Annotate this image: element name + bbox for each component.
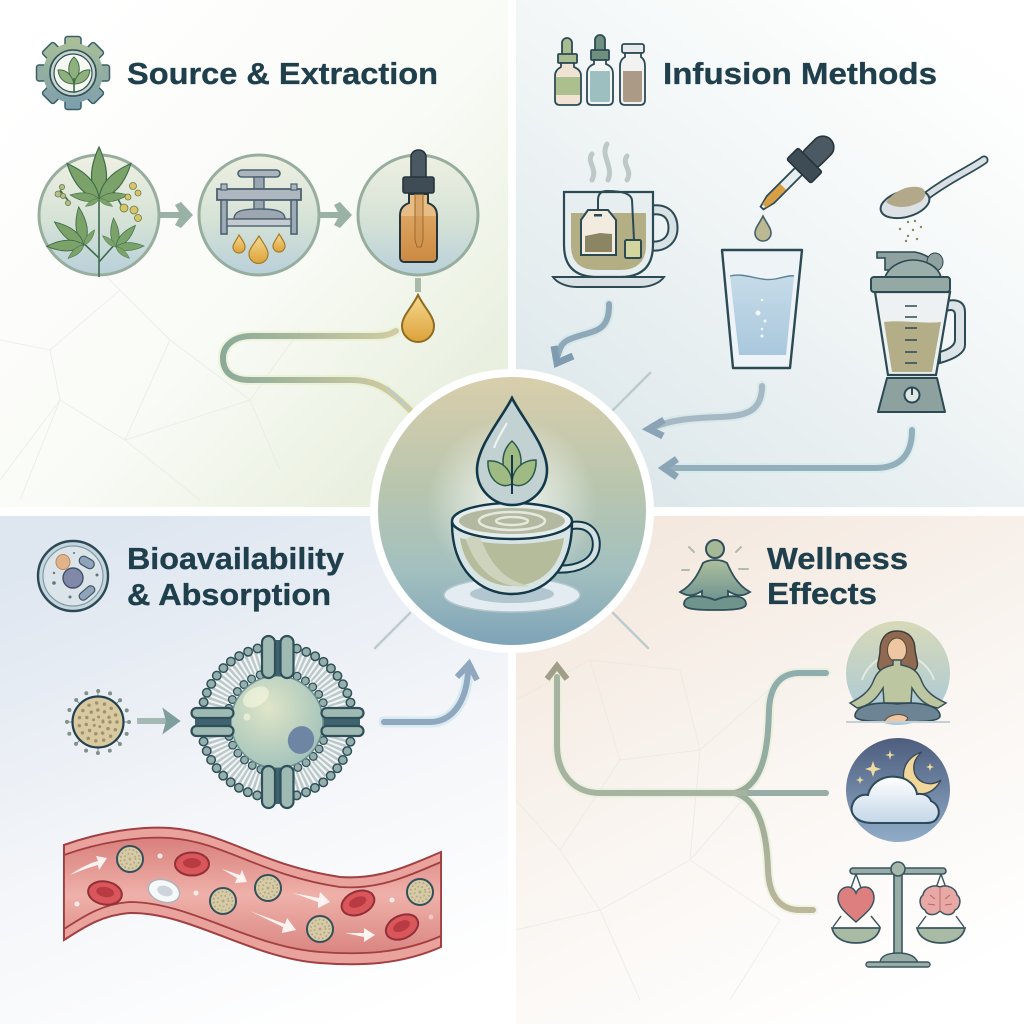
icon: gear with leaf: [36, 36, 110, 110]
heading: wellness effects: [767, 541, 908, 611]
heading: source and extraction: Source & Extraction: [127, 56, 438, 91]
icon: liposome: [192, 636, 364, 808]
icon: meditating figure: [680, 540, 750, 610]
icon: oil bottle circle: [358, 150, 478, 275]
arrow: oil to centre: [223, 331, 410, 410]
vessel flow arrows: [70, 856, 375, 942]
connector stem: [415, 278, 421, 292]
heading: infusion methods: Infusion Methods: [663, 56, 937, 91]
icon: cell: [38, 541, 108, 611]
icon: moon and cloud: [846, 738, 950, 842]
illustration: blood vessel: [64, 828, 441, 964]
panel: infusion methods: [553, 35, 984, 477]
blood cells: [86, 846, 433, 945]
icon: dropper and glass of water: [722, 127, 843, 368]
icon: cup: [452, 503, 596, 594]
spokes around centre: [375, 373, 650, 648]
heading: bioavailability and absorption: Bioavailability: [127, 541, 345, 576]
icon: tea cup with bag: [553, 144, 673, 287]
icon: spoon and blender: [871, 160, 984, 412]
arrow: smoothie to centre: [664, 430, 912, 477]
heading: wellness effects: Wellness: [767, 541, 908, 576]
panel: source and extraction: [36, 36, 478, 410]
heading: bioavailability and absorption: [127, 541, 345, 612]
panel: bioavailability and absorption: [38, 541, 477, 964]
arrow: branching effects to centre: [547, 666, 826, 910]
icon: saucer: [444, 578, 580, 612]
icon: press circle: [199, 155, 319, 275]
arrow: press to bottle: [320, 202, 352, 228]
centre medallion: [370, 369, 654, 653]
plasma dots: [74, 854, 434, 920]
panel: wellness effects: [547, 540, 965, 967]
heading: wellness effects: Effects: [767, 576, 877, 611]
icon: textured particle: [67, 691, 129, 753]
icon: drop with leaf: [477, 398, 547, 505]
arrow: liposome to centre: [384, 664, 477, 722]
icon: plant circle: [39, 147, 159, 277]
arrow: tea to centre: [554, 304, 609, 363]
arrow: water to centre: [649, 386, 762, 436]
icon: three bottles: [555, 35, 645, 105]
icon: balance with heart and brain: [832, 862, 965, 967]
arrow: particle to liposome: [137, 710, 179, 732]
arrow: plant to press: [160, 202, 193, 228]
heading: bioavailability and absorption: & Absorption: [127, 577, 331, 612]
icon: golden oil drop: [402, 295, 434, 342]
icon: calm woman meditating: [846, 621, 950, 725]
